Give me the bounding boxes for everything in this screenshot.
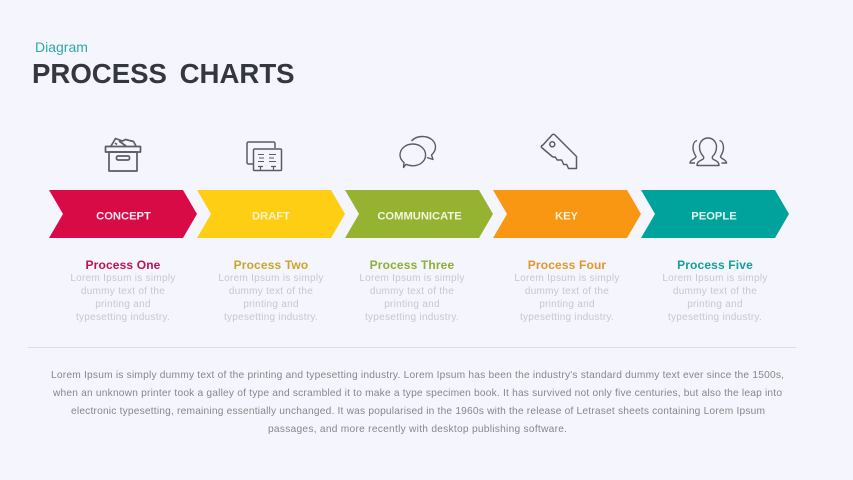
subtitle: Diagram xyxy=(35,39,88,55)
body: process two: Lorem Ipsum is simply xyxy=(218,273,324,284)
body: process two: printing and xyxy=(243,299,299,310)
body: process four xyxy=(514,273,620,323)
body: process four: dummy text of the xyxy=(525,286,609,297)
paragraph xyxy=(51,370,784,435)
title: PROCESS CHARTS xyxy=(32,58,295,89)
body: process one: dummy text of the xyxy=(81,286,165,297)
body: process three: dummy text of the xyxy=(370,286,454,297)
arrow: concept: CONCEPT xyxy=(96,210,151,222)
arrow: draft xyxy=(197,190,345,238)
arrow: concept xyxy=(49,190,197,238)
body: process one: printing and xyxy=(95,299,151,310)
arrow: communicate: COMMUNICATE xyxy=(377,210,462,222)
process two text xyxy=(218,258,324,323)
icon: key xyxy=(541,134,576,168)
body: process five: typesetting industry. xyxy=(668,312,762,323)
arrow: people: PEOPLE xyxy=(691,210,737,222)
arrow: key: KEY xyxy=(555,210,579,222)
body: process three xyxy=(359,273,465,323)
process one text xyxy=(70,258,176,323)
process three text xyxy=(359,258,465,323)
body: process two: dummy text of the xyxy=(229,286,313,297)
body: process three: printing and xyxy=(384,299,440,310)
body: process four: printing and xyxy=(539,299,595,310)
heading: process one: Process One xyxy=(85,258,161,272)
icon: people xyxy=(690,138,726,166)
body: process five: dummy text of the xyxy=(673,286,757,297)
arrow: communicate xyxy=(345,190,493,238)
icon: speech bubbles xyxy=(400,136,436,168)
heading: process five: Process Five xyxy=(677,258,753,272)
arrow: draft: DRAFT xyxy=(252,210,290,222)
heading: process two: Process Two xyxy=(234,258,308,272)
body: process five xyxy=(662,273,768,323)
process five text xyxy=(662,258,768,323)
body: process five: Lorem Ipsum is simply xyxy=(662,273,768,284)
body: process three: typesetting industry. xyxy=(365,312,459,323)
body: process two: typesetting industry. xyxy=(224,312,318,323)
body: process four: typesetting industry. xyxy=(520,312,614,323)
body: process five: printing and xyxy=(687,299,743,310)
arrow: people xyxy=(641,190,789,238)
arrow: key xyxy=(493,190,641,238)
body: process four: Lorem Ipsum is simply xyxy=(514,273,620,284)
icon: archive box xyxy=(106,138,140,171)
body: process two xyxy=(218,273,324,323)
body: process three: Lorem Ipsum is simply xyxy=(359,273,465,284)
heading: process four: Process Four xyxy=(528,258,606,272)
paragraph: electronic typesetting, remaining essentially unchanged. It was popularised in the 1960s with the release of Letraset sheets containing Lorem Ipsum xyxy=(71,406,765,417)
icon: cards xyxy=(247,142,282,170)
body: process one xyxy=(70,273,176,323)
paragraph: Lorem Ipsum is simply dummy text of the printing and typesetting industry. Lorem Ipsum has been the industry's standard dummy text ever since the 1500s, xyxy=(51,370,784,381)
process four text xyxy=(514,258,620,323)
heading: process three: Process Three xyxy=(370,258,454,272)
body: process one: typesetting industry. xyxy=(76,312,170,323)
paragraph: when an unknown printer took a galley of type and scrambled it to make a type specimen book. It has survived not only five centuries, but also the leap into xyxy=(52,388,782,399)
paragraph: passages, and more recently with desktop publishing software. xyxy=(268,424,567,435)
body: process one: Lorem Ipsum is simply xyxy=(70,273,176,284)
